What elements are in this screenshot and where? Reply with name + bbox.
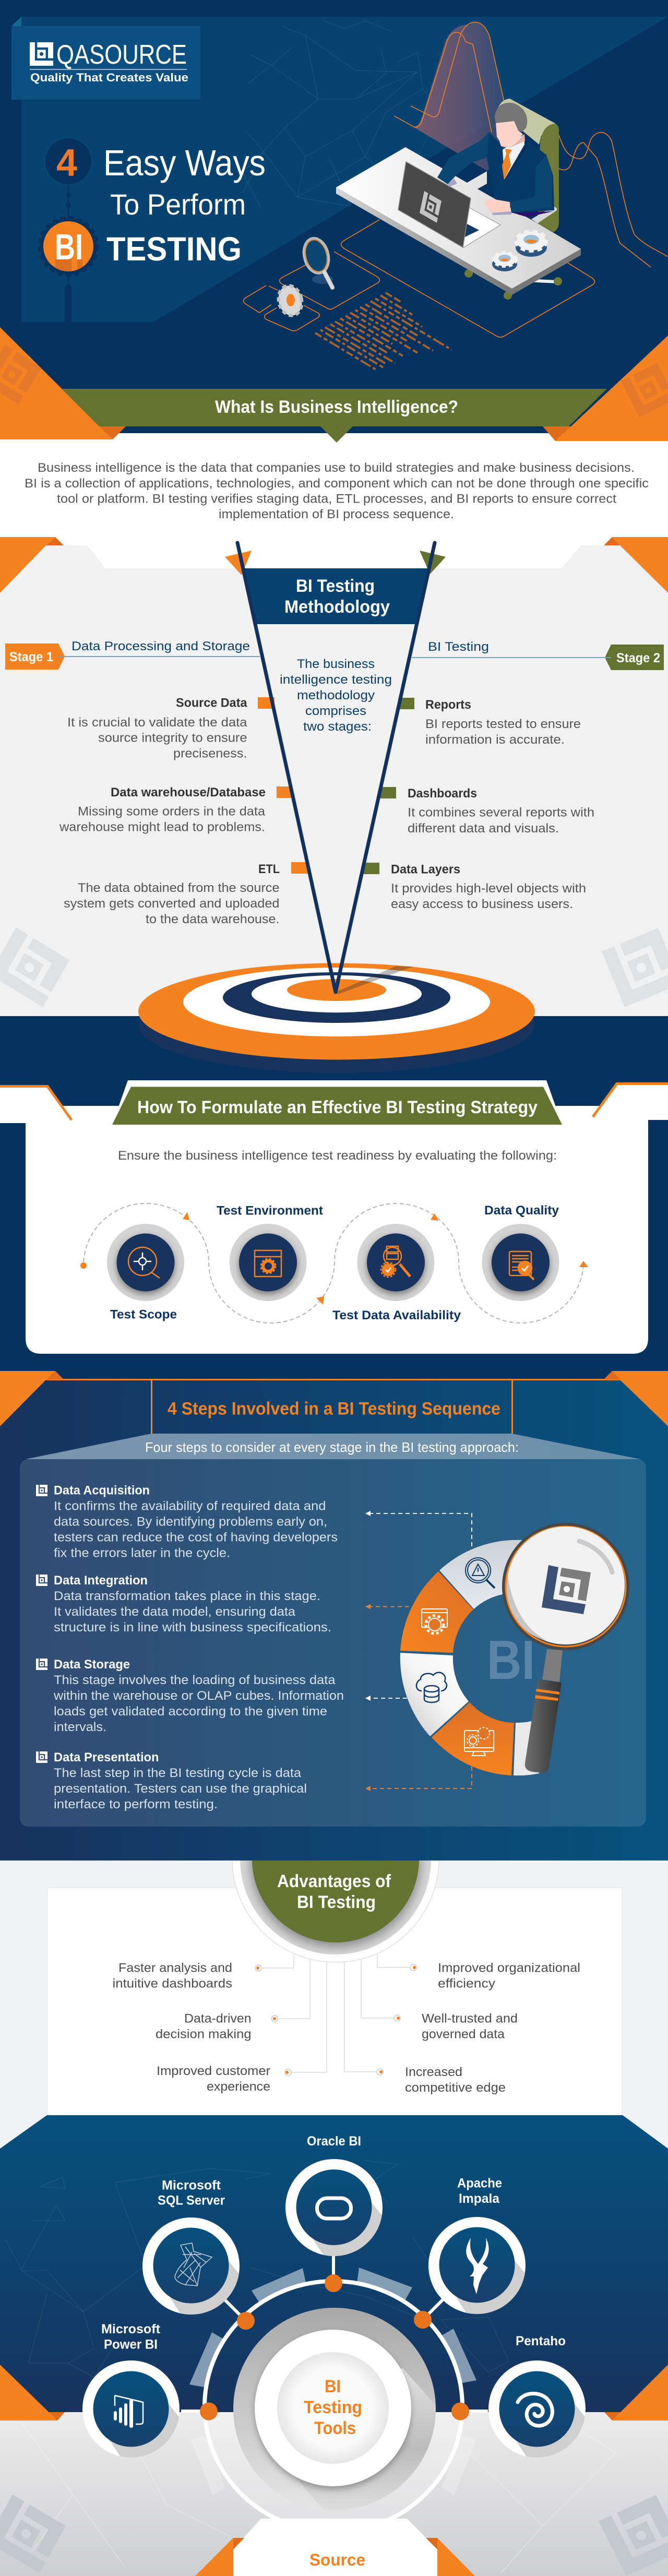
source tab: Source [309, 2550, 365, 2569]
stage 1: source data: Source Data [176, 696, 247, 710]
step list: data presentation: The last step in the BI testing cycle is data [54, 1766, 302, 1780]
icon: cloud database [416, 1673, 447, 1702]
stage 2: data layers: Data Layers [391, 862, 460, 877]
steps heading: 4 Steps Involved in a BI Testing Sequence [168, 1399, 500, 1419]
lower ring fill [243, 2492, 424, 2519]
white connector spokes [181, 2255, 488, 2411]
stage 2: data layers: easy access to business users. [391, 897, 573, 911]
tools light background [0, 2412, 668, 2576]
stage 1: data warehouse: warehouse might lead to problems. [59, 820, 265, 834]
stage 2: reports: BI reports tested to ensure [425, 717, 581, 731]
step list: data acquisition: testers can reduce the cost of having developers [54, 1531, 338, 1545]
segment: closing sliver [514, 1721, 539, 1775]
steps heading [151, 1379, 513, 1434]
watermark left [0, 927, 69, 1007]
stage 1 header: Data Processing and Storage [71, 639, 250, 653]
orange corner tools right [604, 2365, 668, 2420]
funnel flag orange [225, 551, 252, 575]
step labels [110, 1203, 559, 1322]
BI gear badge: BI [55, 226, 83, 267]
intro paragraph: tool or platform. BI testing verifies staging data, ETL processes, and BI reports to ensure correct [57, 492, 616, 506]
tool: pentaho [488, 2336, 586, 2458]
step list: data integration: It validates the data model, ensuring data [54, 1605, 296, 1619]
lens logo [542, 1565, 591, 1614]
intro paragraph: implementation of BI process sequence. [219, 507, 454, 521]
orange corner steps right [604, 1371, 668, 1426]
heading band: what is BI [62, 389, 607, 443]
stage 1: source data: source integrity to ensure [98, 731, 247, 745]
dashed flow path [84, 1203, 583, 1323]
target illustration [138, 963, 535, 1073]
stage 1: data warehouse: Data warehouse/Database [111, 785, 266, 800]
magnifier lens [502, 1523, 629, 1650]
advantages badge: BI Testing [297, 1892, 376, 1912]
stage 1: ETL: system gets converted and uploaded [64, 897, 280, 911]
desk gears [492, 232, 547, 271]
stage 2: data layers [362, 862, 586, 911]
advantage: well-trusted data [422, 2012, 518, 2042]
stage 2: dashboards: different data and visuals. [408, 821, 559, 836]
stage 1: source data: preciseness. [173, 746, 247, 761]
intro paragraph [25, 461, 649, 521]
watermark lower right [599, 2495, 668, 2576]
label: Microsoft [101, 2322, 161, 2336]
label: Pentaho [516, 2334, 566, 2348]
advantage: faster analysis: Faster analysis and [118, 1961, 232, 1975]
tool: SQL server [142, 2180, 240, 2315]
step list: data integration: structure is in line with business specifications. [54, 1620, 331, 1635]
intro paragraph: BI is a collection of applications, technologies, and component which can not be done through one specific [25, 476, 649, 491]
flow arrowheads [183, 1212, 588, 1305]
advantages section [0, 1861, 668, 2149]
icon: gear window [255, 1250, 281, 1277]
advantage: faster analysis [113, 1961, 232, 1990]
gear illustration [276, 283, 305, 318]
heading band: what is BI: What Is Business Intelligence? [215, 397, 458, 417]
desk illustration [336, 99, 581, 300]
step list: data presentation: interface to perform testing. [54, 1797, 218, 1811]
stage 2 header [412, 640, 664, 670]
step list: data storage: intervals. [54, 1720, 106, 1734]
icon: impala head [466, 2238, 489, 2294]
icon: pentaho spiral [518, 2393, 552, 2426]
step list: data storage [36, 1657, 344, 1734]
tools section [0, 2115, 668, 2576]
segment: integration [400, 1571, 473, 1653]
stage 2: dashboards [380, 786, 594, 836]
businessman [437, 103, 554, 217]
number 4 badge: 4 [56, 142, 77, 184]
peak chart curves [394, 22, 668, 267]
methodology title block [244, 568, 427, 624]
orange line top [46, 1379, 620, 1380]
step list: data storage: Data Storage [54, 1657, 130, 1672]
logo box [11, 17, 200, 100]
label [101, 2322, 161, 2352]
orange corner methodology left [0, 537, 64, 593]
intro paragraph: Business intelligence is the data that companies use to build strategies and make business decisions. [38, 461, 635, 475]
advantage: competitive edge: Increased [405, 2065, 462, 2079]
stage 2: reports [399, 698, 581, 747]
label: Apache [457, 2176, 502, 2190]
hub label: Tools [314, 2418, 356, 2438]
icon: oracle [317, 2198, 351, 2219]
step list: data integration [36, 1573, 331, 1635]
stage 2: reports: information is accurate. [425, 733, 565, 747]
advantages badge: Advantages of [277, 1871, 391, 1891]
advantages badge [232, 1861, 439, 1963]
funnel center text: two stages: [303, 720, 372, 734]
orange corner steps left [0, 1371, 64, 1426]
advantage: organizational efficiency [438, 1961, 580, 1990]
advantage: competitive edge [405, 2065, 506, 2095]
advantage: organizational efficiency: efficiency [438, 1977, 495, 1990]
QASOURCE wordmark: QASOURCE [56, 40, 187, 70]
BI gear badge [40, 218, 97, 275]
hub label: BI [325, 2377, 341, 2396]
main title: To Perform [110, 188, 246, 221]
label: Oracle BI [307, 2134, 361, 2149]
navy band under target [0, 1016, 668, 1381]
advantage: well-trusted data: governed data [422, 2028, 505, 2042]
step list: data presentation: Data Presentation [54, 1750, 159, 1764]
label: SQL Server [158, 2193, 225, 2208]
tools blue background [0, 2115, 668, 2412]
stage 2 header: Stage 2 [616, 651, 660, 665]
methodology title block: Methodology [284, 597, 390, 617]
segment: storage [400, 1653, 469, 1736]
code dashes [315, 293, 451, 369]
icon: power BI bars [114, 2395, 143, 2428]
advantage: well-trusted data: Well-trusted and [422, 2012, 518, 2026]
stage 2: dashboards: Dashboards [408, 786, 477, 801]
strategy intro: Ensure the business intelligence test readiness by evaluating the following: [118, 1149, 557, 1163]
advantage dots [255, 1964, 416, 2076]
icon: server magnifier [381, 1246, 410, 1277]
source tab [195, 2519, 475, 2576]
icon: target magnifier [128, 1247, 160, 1278]
advantage: competitive edge: competitive edge [405, 2081, 506, 2095]
segment: presentation [432, 1702, 514, 1775]
funnel V lines [237, 543, 435, 992]
step labels: Test Environment [217, 1203, 323, 1218]
stage 1 header [5, 639, 260, 670]
advantage: customer experience: Improved customer [157, 2064, 270, 2078]
step labels: Data Quality [484, 1203, 559, 1218]
magnifier handle [525, 1649, 563, 1773]
stage 2 header: BI Testing [428, 640, 489, 654]
chair [497, 99, 559, 232]
step: test scope [107, 1224, 184, 1301]
step list: data acquisition: fix the errors later in the cycle. [54, 1546, 230, 1560]
flow start dot [80, 1262, 87, 1269]
steps panel [20, 1459, 646, 1827]
stage 2: reports: Reports [425, 698, 471, 712]
strategy heading: How To Formulate an Effective BI Testing Strategy [137, 1098, 538, 1117]
advantages white panel [47, 1888, 622, 2118]
dashed pointers [365, 1511, 472, 1791]
label [158, 2178, 225, 2208]
step list: data acquisition: It confirms the availability of required data and [54, 1499, 326, 1513]
hub label [304, 2377, 362, 2438]
lighter diagonal hero panel [21, 17, 668, 322]
big BI letters: BI [487, 1629, 535, 1691]
funnel center text: methodology [297, 688, 375, 702]
label: Impala [459, 2191, 500, 2206]
hero section [0, 0, 668, 433]
advantage: customer experience: experience [207, 2080, 270, 2094]
watermark right [602, 928, 668, 1007]
orange corner right [543, 336, 668, 441]
connector lines [261, 1953, 411, 2072]
stage 1: ETL: to the data warehouse. [146, 912, 280, 926]
methodology title block: BI Testing [296, 576, 375, 596]
tool: oracle BI [285, 2136, 383, 2256]
steps subheading trapezoid [26, 1434, 640, 1459]
stage 1: source data [67, 696, 275, 761]
advantage: customer experience [157, 2064, 270, 2094]
step: data quality [482, 1224, 559, 1301]
step list: data storage: This stage involves the loading of business data [54, 1673, 336, 1687]
step list: data acquisition: data sources. By identifying problems early on, [54, 1515, 327, 1529]
watermark lower left [0, 2495, 66, 2573]
advantage: data-driven: decision making [156, 2028, 252, 2042]
tool: apache impala [428, 2178, 526, 2314]
stage 2: dashboards: It combines several reports with [408, 806, 594, 819]
orange corner tools left [0, 2365, 65, 2420]
icon: report check [509, 1251, 534, 1280]
funnel center text [280, 657, 392, 734]
ring arc [205, 2281, 462, 2532]
lower network pattern [21, 2422, 616, 2573]
main title: Easy Ways [103, 142, 266, 183]
logo mark [30, 42, 53, 66]
advantage: faster analysis: intuitive dashboards [113, 1977, 232, 1990]
stage 1 header: Stage 1 [9, 650, 53, 664]
stage 1: ETL: ETL [258, 862, 280, 876]
label: Power BI [104, 2337, 158, 2352]
step: test environment [230, 1224, 307, 1301]
icon: gear window [422, 1609, 447, 1633]
main title: TESTING [106, 230, 242, 268]
magnifier illustration [300, 235, 333, 288]
advantage: organizational efficiency: Improved organizational [438, 1961, 580, 1975]
tool: power BI [82, 2324, 180, 2458]
title ornament chain [65, 183, 71, 322]
label [457, 2176, 502, 2206]
steps section background [0, 1379, 668, 1861]
funnel center text: comprises [305, 704, 366, 718]
steps subheading trapezoid: Four steps to consider at every stage in the BI testing approach: [145, 1439, 519, 1455]
stage 1: data warehouse: Missing some orders in the data [78, 805, 266, 818]
arc segments [189, 2268, 476, 2387]
lower faint arc segments [190, 2436, 476, 2496]
stage 1: ETL: The data obtained from the source [78, 881, 280, 895]
number 4 badge [45, 138, 92, 185]
stage 1: data warehouse [59, 785, 292, 834]
orange corner methodology right [604, 537, 668, 593]
step list: data integration: Data transformation takes place in this stage. [54, 1589, 320, 1603]
label: Microsoft [162, 2178, 221, 2193]
step list: data storage: within the warehouse or OLAP cubes. Information [53, 1689, 344, 1703]
icon: warning magnifier [466, 1558, 495, 1588]
ring nodes [200, 2274, 469, 2420]
orange outline tiles [243, 220, 595, 337]
step list: data presentation: presentation. Testers can use the graphical [54, 1782, 307, 1796]
hub label: Testing [304, 2398, 362, 2417]
center hub [233, 2308, 436, 2509]
segment: acquisition [439, 1540, 523, 1609]
orange corner left [0, 327, 126, 439]
BI donut chart [400, 1523, 629, 1775]
stage 2: data layers: It provides high-level objects with [391, 881, 586, 896]
background network pattern [243, 21, 454, 209]
network pattern [5, 2161, 509, 2377]
funnel center text: The business [297, 657, 375, 671]
stage 1: ETL [64, 862, 309, 926]
main title [103, 142, 266, 268]
step list: data storage: loads get validated according to the given time [54, 1704, 327, 1719]
step list: data acquisition [36, 1484, 338, 1560]
methodology section background [0, 545, 668, 1016]
step list: data integration: Data Integration [54, 1573, 148, 1588]
step labels: Test Scope [110, 1308, 177, 1321]
step labels: Test Data Availability [332, 1308, 461, 1322]
step: test data availability [357, 1224, 434, 1301]
funnel flag olive [420, 551, 446, 574]
stage 1: source data: It is crucial to validate the data [67, 715, 247, 730]
advantage: data-driven [156, 2012, 252, 2042]
tagline: Quality That Creates Value [30, 71, 188, 84]
strategy heading [112, 1080, 562, 1125]
step list: data acquisition: Data Acquisition [54, 1484, 150, 1498]
icon: monitor gears [464, 1727, 494, 1756]
laptop [398, 162, 500, 247]
step list: data presentation [36, 1750, 307, 1811]
strategy panel [0, 1080, 668, 1354]
funnel center text: intelligence testing [280, 673, 392, 687]
icon: sql lattice [175, 2243, 212, 2286]
advantage: data-driven: Data-driven [184, 2012, 252, 2026]
